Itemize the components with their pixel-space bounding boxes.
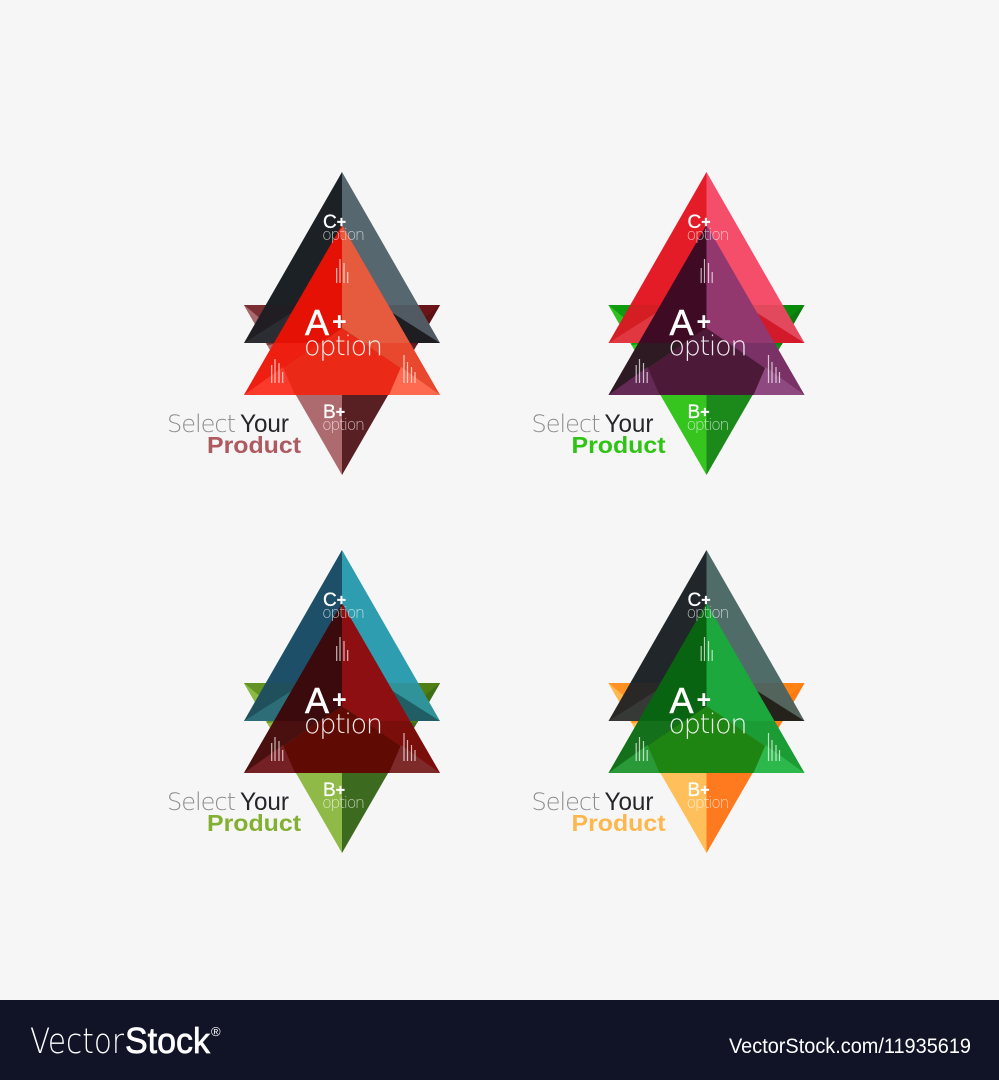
heading: Select Your Product: Your: [604, 788, 654, 816]
label: B+ option: option: [322, 415, 365, 434]
footer image id: VectorStock.com/11935619: [729, 1035, 971, 1058]
label: C+ option: C: [323, 590, 337, 611]
label: A+ option: A: [305, 302, 329, 343]
heading: Select Your Product: Product: [572, 810, 666, 836]
triangle B: rear inverted triangle: [608, 683, 804, 853]
heading: Select Your Product: [167, 788, 301, 836]
footer logo: VectorStock: Stock: [125, 1020, 211, 1061]
label: C+ option: +: [337, 592, 346, 609]
label: B+ option: option: [686, 793, 730, 812]
label: B+ option: option: [322, 793, 365, 812]
label: B+ option: +: [700, 404, 710, 421]
label: A+ option: [304, 302, 383, 362]
heading: Select Your Product: [532, 788, 666, 836]
footer bar: [0, 1000, 999, 1080]
label: A+ option: [304, 680, 383, 740]
footer logo: VectorStock: Vector: [30, 1022, 125, 1062]
tick marks: [272, 259, 415, 383]
label: A+ option: option: [304, 709, 383, 740]
footer logo: VectorStock: [30, 1020, 221, 1062]
triangle A: front triangle: [608, 603, 804, 773]
label: A+ option: [668, 302, 748, 362]
heading: Select Your Product: Product: [572, 432, 666, 458]
heading: Select Your Product: Your: [604, 410, 654, 438]
panel: green and orange option diagram: [532, 550, 804, 853]
label: C+ option: option: [686, 225, 730, 244]
label: B+ option: [686, 780, 730, 812]
panel: crimson and green option diagram: [532, 172, 804, 475]
triangle A: front triangle: [244, 603, 440, 773]
heading: Select Your Product: Product: [207, 810, 301, 836]
label: C+ option: option: [322, 603, 365, 622]
label: A+ option: +: [697, 308, 711, 336]
label: A+ option: option: [304, 331, 383, 362]
triangle C: upper triangle: [244, 172, 440, 343]
label: C+ option: C: [323, 212, 337, 233]
label: B+ option: [686, 402, 730, 434]
heading: Select Your Product: Select: [167, 410, 236, 438]
label: B+ option: [322, 402, 365, 434]
label: B+ option: +: [700, 782, 710, 799]
triangle C: upper triangle: [244, 550, 440, 721]
label: C+ option: [322, 590, 365, 622]
heading: Select Your Product: Your: [240, 410, 289, 438]
label: B+ option: option: [686, 415, 730, 434]
triangle B: rear inverted triangle: [244, 305, 440, 475]
triangle B: rear inverted triangle: [608, 305, 804, 475]
label: A+ option: [668, 680, 748, 740]
panel: red and charcoal option diagram: [167, 172, 440, 475]
triangle A: front triangle: [244, 225, 440, 395]
heading: Select Your Product: [532, 410, 666, 458]
label: A+ option: option: [668, 709, 748, 740]
label: B+ option: +: [336, 782, 345, 799]
label: B+ option: B: [323, 402, 336, 423]
label: A+ option: A: [670, 680, 694, 721]
tick marks: [636, 259, 780, 383]
tick marks: [272, 637, 415, 761]
label: A+ option: A: [670, 302, 694, 343]
heading: Select Your Product: Select: [532, 788, 600, 816]
heading: Select Your Product: Product: [207, 432, 301, 458]
footer logo: VectorStock: ®: [211, 1024, 221, 1039]
heading: Select Your Product: Select: [532, 410, 600, 438]
label: C+ option: +: [701, 214, 711, 231]
label: C+ option: option: [322, 225, 365, 244]
label: C+ option: C: [688, 212, 701, 233]
label: B+ option: B: [323, 780, 336, 801]
label: C+ option: +: [337, 214, 346, 231]
label: B+ option: +: [336, 404, 345, 421]
label: A+ option: +: [332, 686, 347, 714]
triangle A: front triangle: [608, 225, 804, 395]
label: C+ option: C: [688, 590, 701, 611]
label: A+ option: A: [305, 680, 329, 721]
heading: Select Your Product: Select: [167, 788, 236, 816]
triangle C: upper triangle: [608, 550, 804, 721]
label: C+ option: option: [686, 603, 730, 622]
label: C+ option: +: [701, 592, 711, 609]
heading: Select Your Product: [167, 410, 301, 458]
label: A+ option: +: [332, 308, 347, 336]
panel: teal and dark red option diagram: [167, 550, 440, 853]
label: B+ option: B: [688, 402, 700, 423]
label: A+ option: option: [668, 331, 748, 362]
heading: Select Your Product: Your: [240, 788, 289, 816]
label: B+ option: [322, 780, 365, 812]
tick marks: [636, 637, 780, 761]
label: C+ option: [322, 212, 365, 244]
label: C+ option: [686, 590, 730, 622]
triangle B: rear inverted triangle: [244, 683, 440, 853]
label: C+ option: [686, 212, 730, 244]
triangle C: upper triangle: [608, 172, 804, 343]
label: A+ option: +: [697, 686, 711, 714]
label: B+ option: B: [688, 780, 700, 801]
